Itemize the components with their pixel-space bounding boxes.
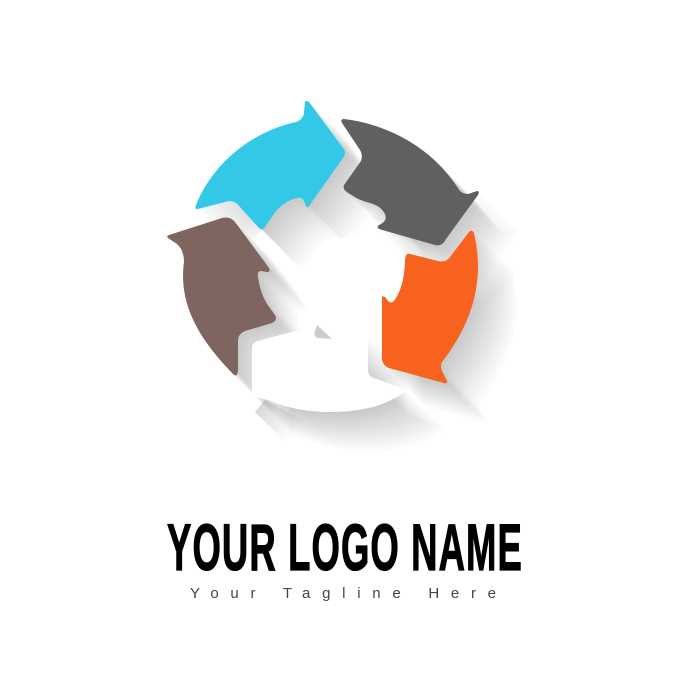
- long shadows: [170, 104, 518, 451]
- icon: orange arrow: [382, 231, 478, 383]
- shadow: brown arrow: [170, 220, 315, 414]
- icon: white arrow: [252, 325, 407, 412]
- small grey sliver in the centre: [314, 325, 332, 339]
- tagline: Your Tagline Here: [190, 585, 496, 602]
- icon: brown arrow: [167, 218, 276, 375]
- shadow wedge at the lower left of the white arrow: [255, 400, 312, 447]
- icon: dark grey arrow: [341, 119, 479, 245]
- shadow: grey arrow: [344, 122, 518, 284]
- shadow: blue arrow: [198, 104, 384, 268]
- shadow: white arrow: [255, 328, 446, 451]
- shadow: orange arrow: [385, 234, 517, 422]
- icon: blue arrow: [195, 101, 345, 229]
- white centre of the ring: [300, 232, 392, 340]
- shadow gap under the brown arrow: [252, 230, 306, 284]
